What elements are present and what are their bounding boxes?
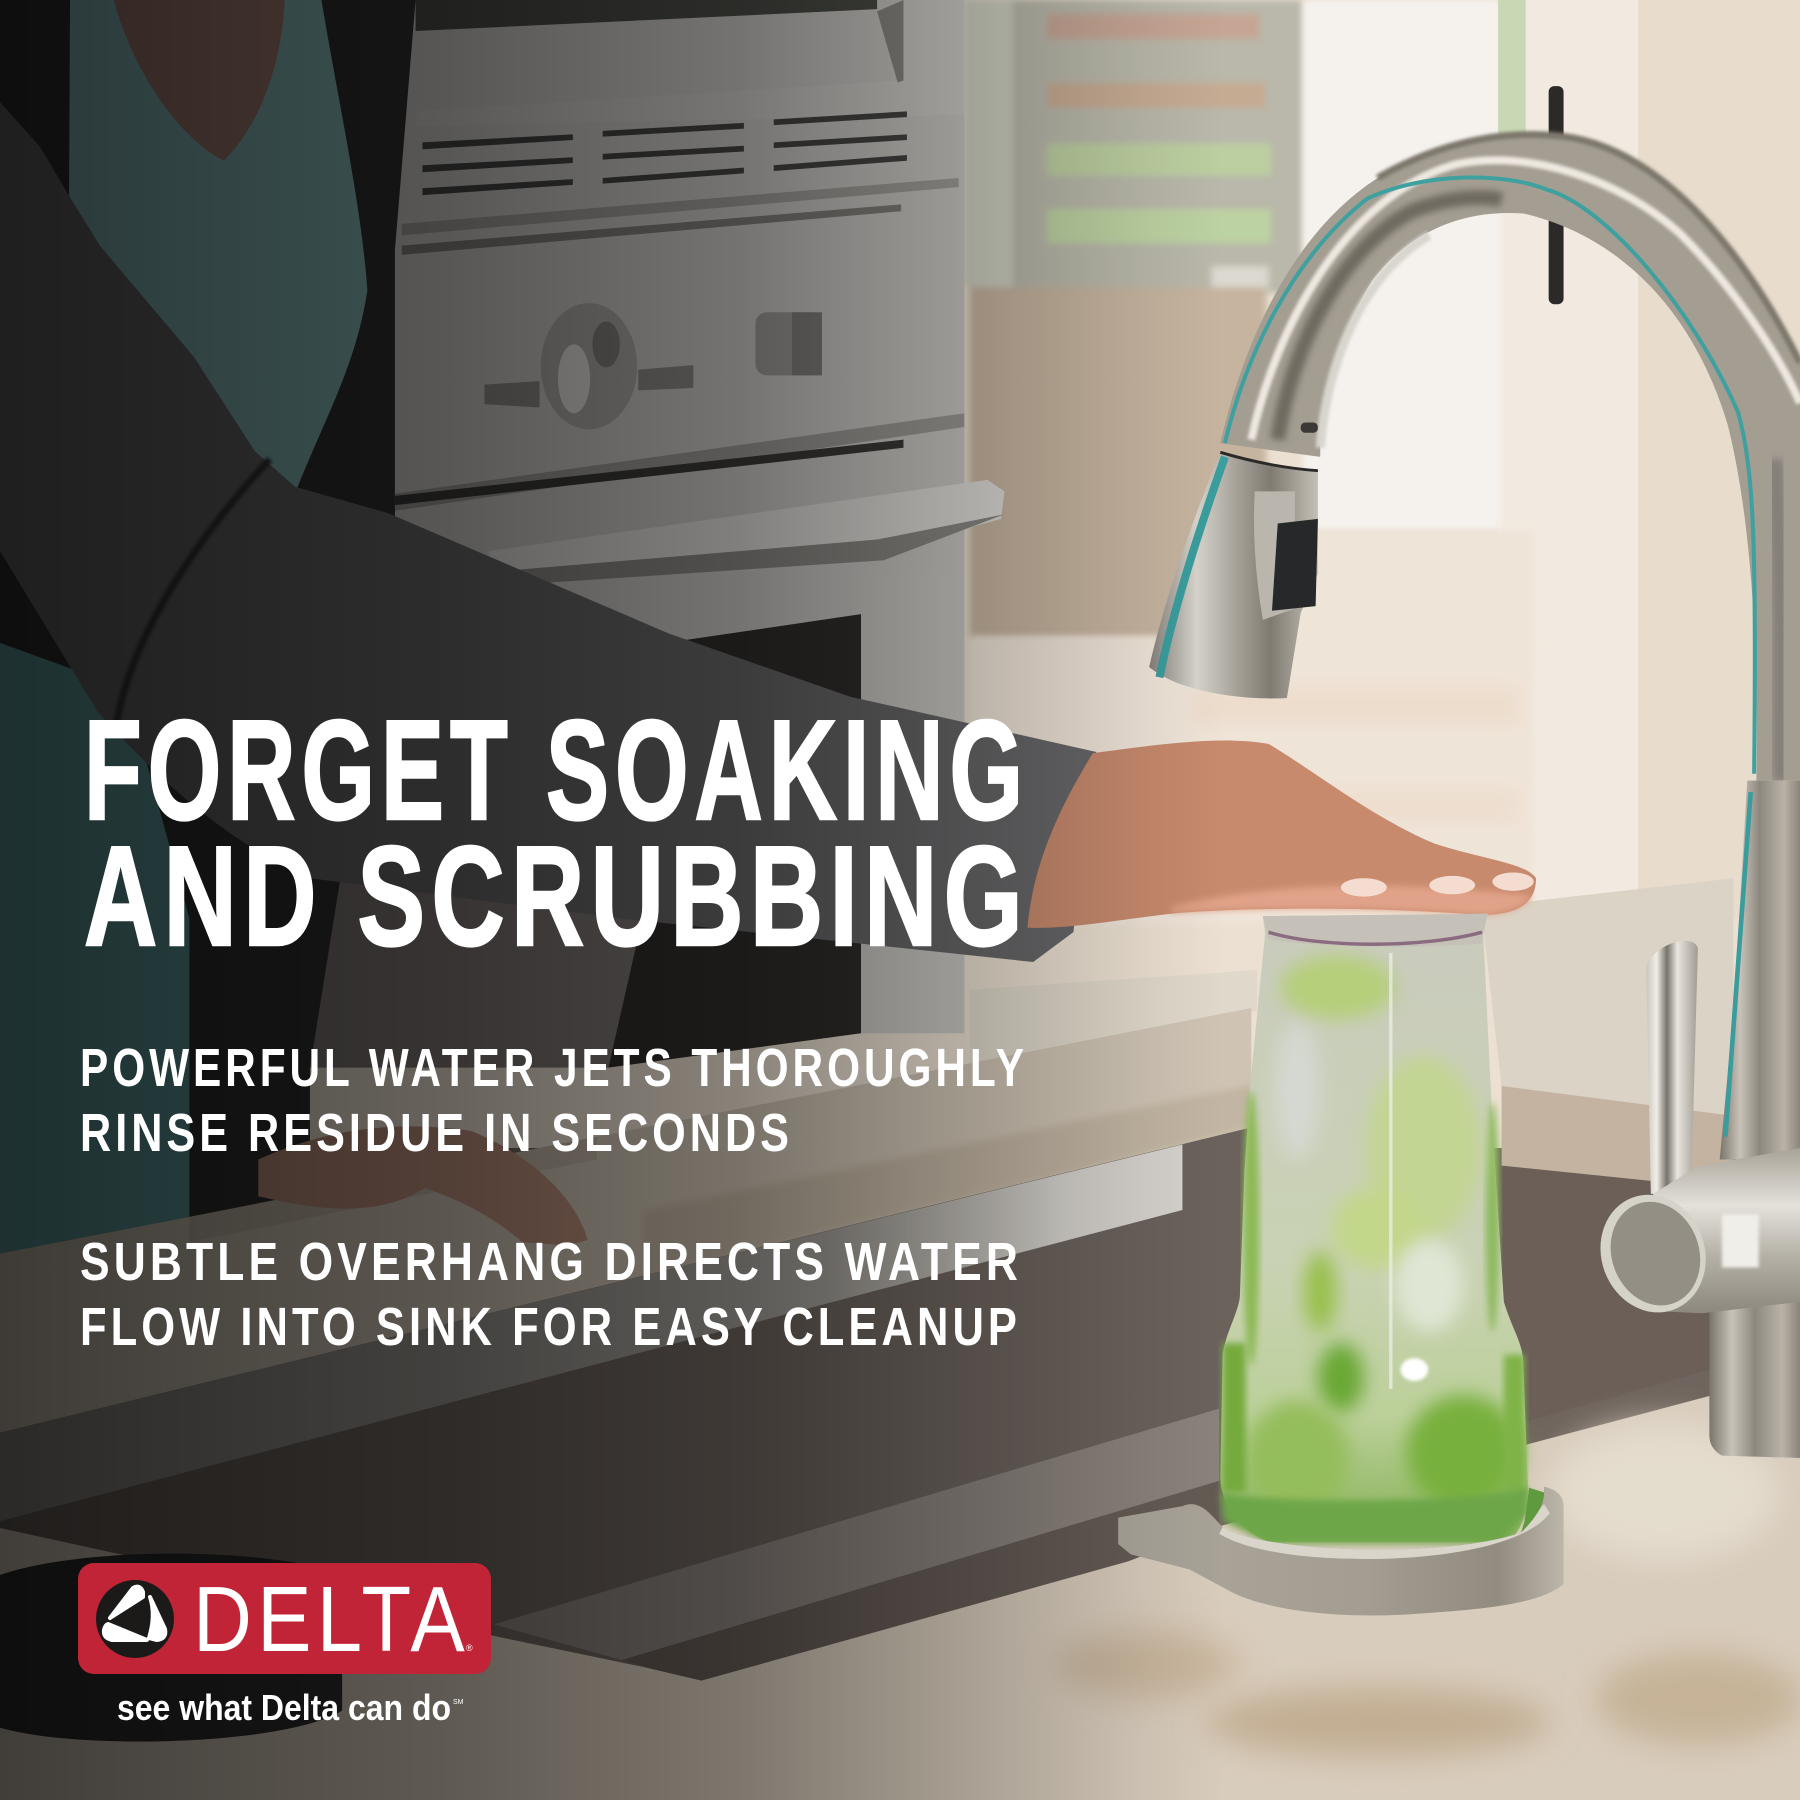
hand shading	[1171, 885, 1533, 915]
faucet: lower body	[1720, 781, 1800, 1159]
front counter	[0, 1372, 1800, 1800]
wall background	[0, 0, 1800, 1148]
background shelf	[964, 0, 1303, 637]
base tray	[1118, 1487, 1564, 1615]
oven	[310, 0, 1005, 1068]
faucet: base	[1709, 1302, 1800, 1458]
sink	[0, 1127, 1722, 1683]
hand	[1027, 740, 1536, 928]
green gap and dark door handle	[1498, 0, 1564, 304]
icon: Delta triangle mark	[96, 1580, 174, 1658]
text block: overhang: FLOW INTO SINK FOR EASY CLEANUP	[80, 1297, 1021, 1357]
jar	[1220, 914, 1528, 1544]
counter: back marble edge	[0, 1008, 1251, 1433]
black bowl	[0, 1554, 342, 1742]
logo: Delta	[78, 1563, 491, 1728]
arm sleeve	[0, 102, 1096, 962]
heading: AND SCRUBBING	[84, 817, 1029, 976]
counter: right marble	[1481, 878, 1733, 1188]
person: torso	[0, 0, 416, 1274]
heading: FORGET SOAKING	[84, 691, 1029, 850]
text block: water jets	[80, 1038, 1028, 1163]
heading	[84, 691, 1029, 976]
text block: overhang: SUBTLE OVERHANG DIRECTS WATER	[80, 1232, 1022, 1292]
arm crease	[115, 459, 270, 735]
counter: back surface	[970, 970, 1257, 1068]
text block: water jets: POWERFUL WATER JETS THOROUGHLY	[80, 1038, 1028, 1098]
second hand	[258, 1126, 588, 1246]
nails	[1341, 872, 1534, 897]
tagline: see what Delta can do	[117, 1687, 451, 1728]
service mark: SM	[453, 1699, 464, 1706]
wordmark: DELTA	[193, 1567, 470, 1671]
text block: water jets: RINSE RESIDUE IN SECONDS	[80, 1103, 793, 1163]
faucet: gooseneck	[1220, 134, 1800, 781]
floor	[970, 530, 1533, 924]
text block: overhang	[80, 1232, 1022, 1357]
registered mark: ®	[466, 1643, 473, 1653]
faucet: handle	[1584, 941, 1800, 1327]
white column	[1303, 0, 1500, 530]
faucet: spray head	[1149, 422, 1318, 698]
